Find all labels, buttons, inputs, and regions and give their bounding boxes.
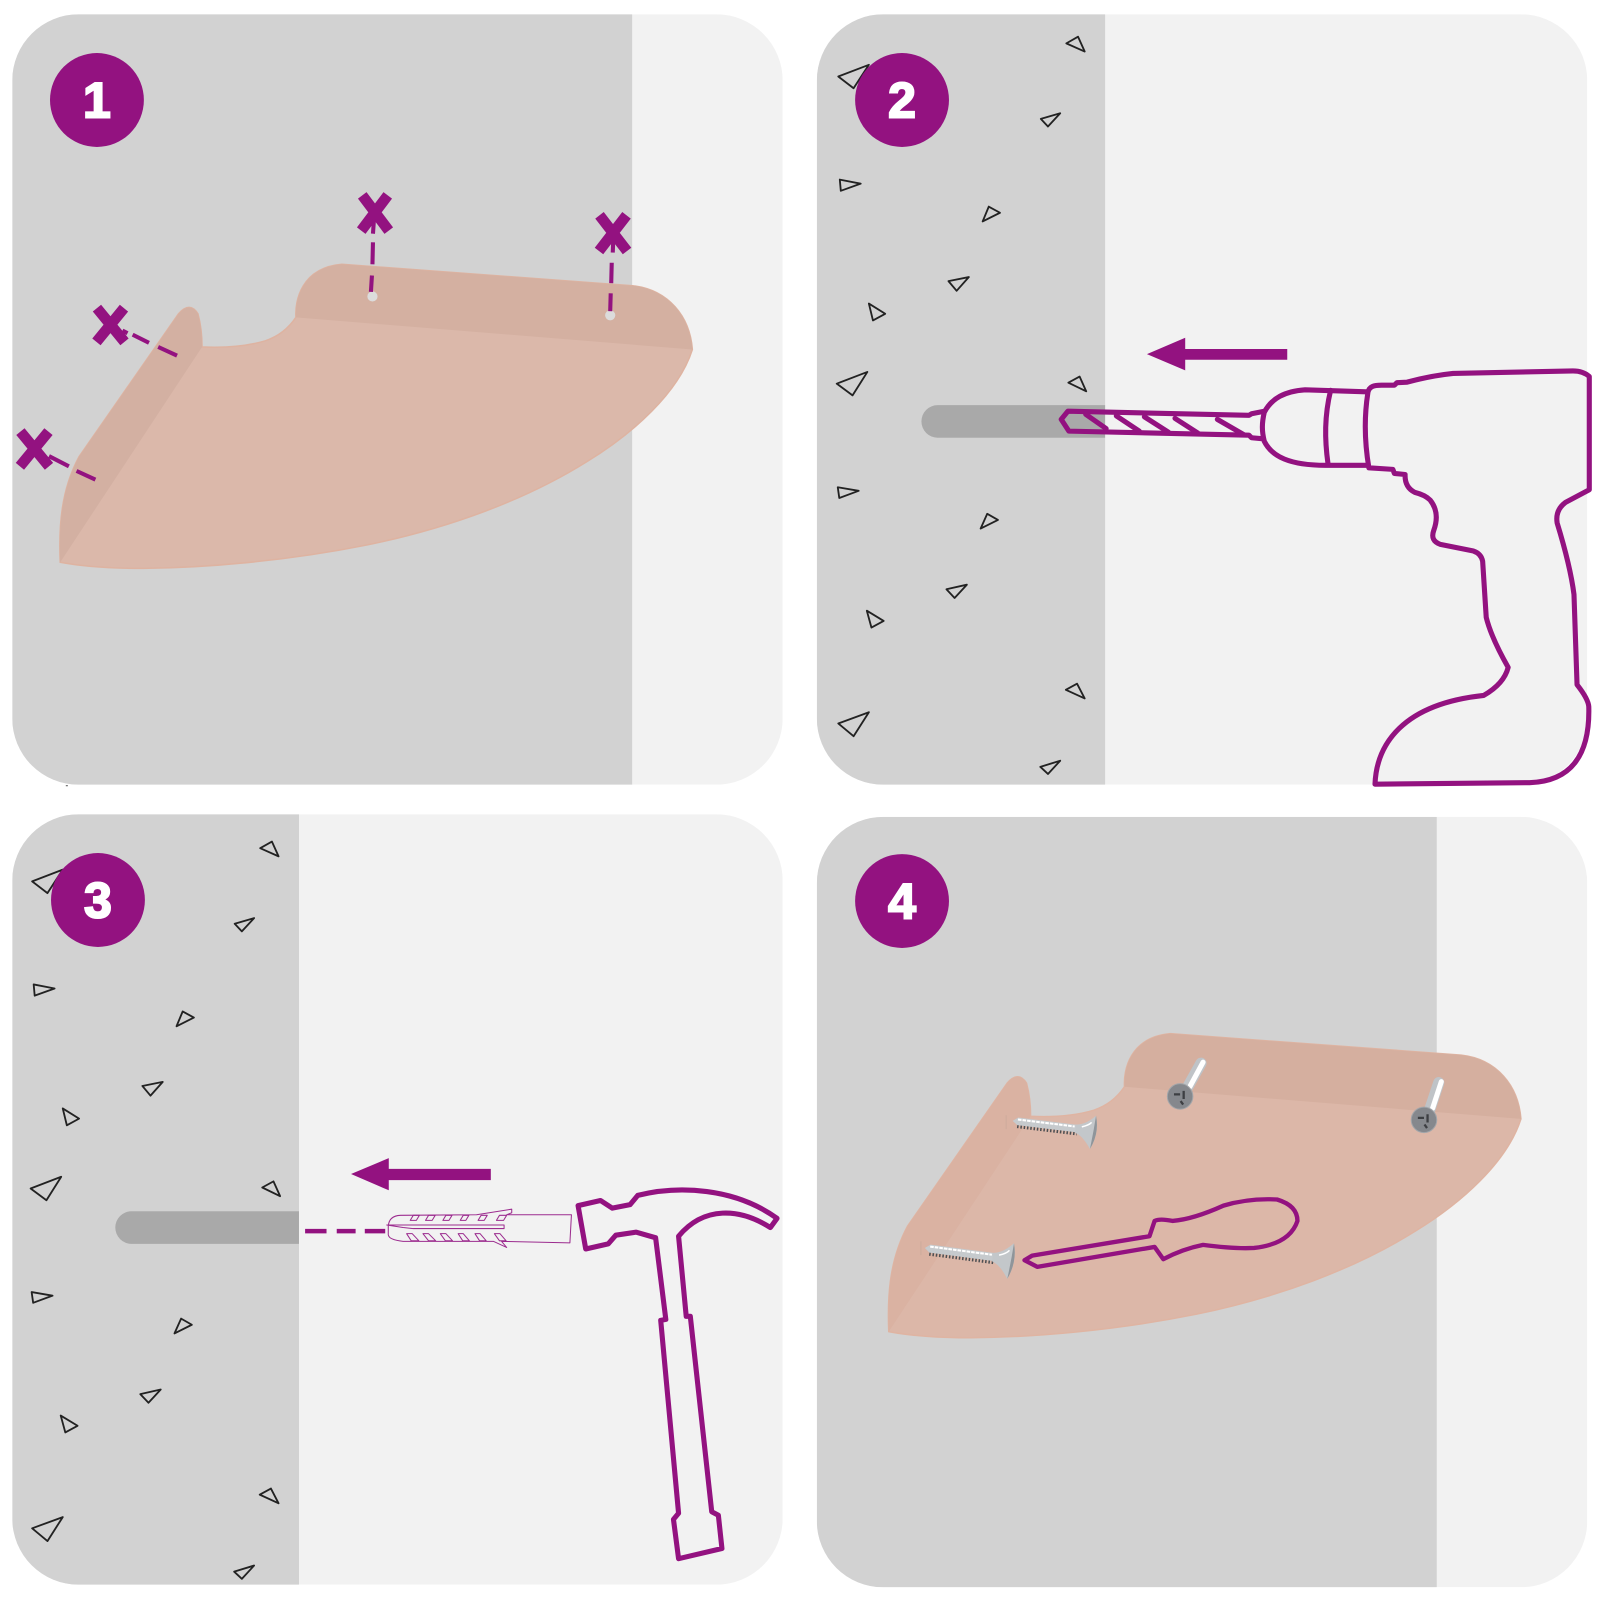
panel: step 4 screw the shelf <box>817 817 1587 1587</box>
panel 4 background <box>817 817 1587 1587</box>
concrete texture triangles <box>31 842 280 1579</box>
screw holes <box>367 291 615 320</box>
icon: screw back left <box>1167 1062 1203 1109</box>
icon: screw upper left <box>1010 1106 1098 1149</box>
drilled hole <box>921 405 1105 438</box>
arrow <box>1147 338 1287 370</box>
panel 2 background <box>817 14 1587 785</box>
icon: wall plug <box>387 1209 571 1247</box>
step number 3 <box>51 853 145 947</box>
step number 2: 2 <box>888 72 916 128</box>
panel 3 background <box>12 814 783 1585</box>
step number 4: 4 <box>888 873 916 929</box>
screw tip marks <box>921 1115 1006 1255</box>
panel 1 background <box>12 14 783 785</box>
arrow <box>351 1158 491 1190</box>
icon: drill <box>1061 371 1589 784</box>
icon: screw lower left <box>922 1232 1016 1279</box>
drilled hole <box>115 1211 299 1244</box>
panel: step 3 insert wall plug <box>12 814 783 1585</box>
panel: step 1 mark the wall <box>12 14 783 786</box>
step number 2 <box>855 53 949 147</box>
dashed guide line <box>305 1227 385 1236</box>
step number 3: 3 <box>84 872 112 928</box>
icon: screwdriver <box>1024 1199 1297 1267</box>
panel: step 2 drill hole <box>817 14 1589 785</box>
drill marks: crosses <box>20 195 627 466</box>
step number 1: 1 <box>83 72 111 128</box>
speck below panel <box>66 785 68 786</box>
concrete texture triangles <box>837 37 1086 774</box>
dashed guide lines <box>49 219 613 480</box>
step number 1 <box>50 53 144 147</box>
step number 4 <box>855 854 949 948</box>
shelf outline <box>888 1034 1521 1338</box>
icon: screw back right <box>1411 1082 1441 1133</box>
icon: hammer <box>578 1190 777 1559</box>
shelf outline <box>60 264 692 568</box>
